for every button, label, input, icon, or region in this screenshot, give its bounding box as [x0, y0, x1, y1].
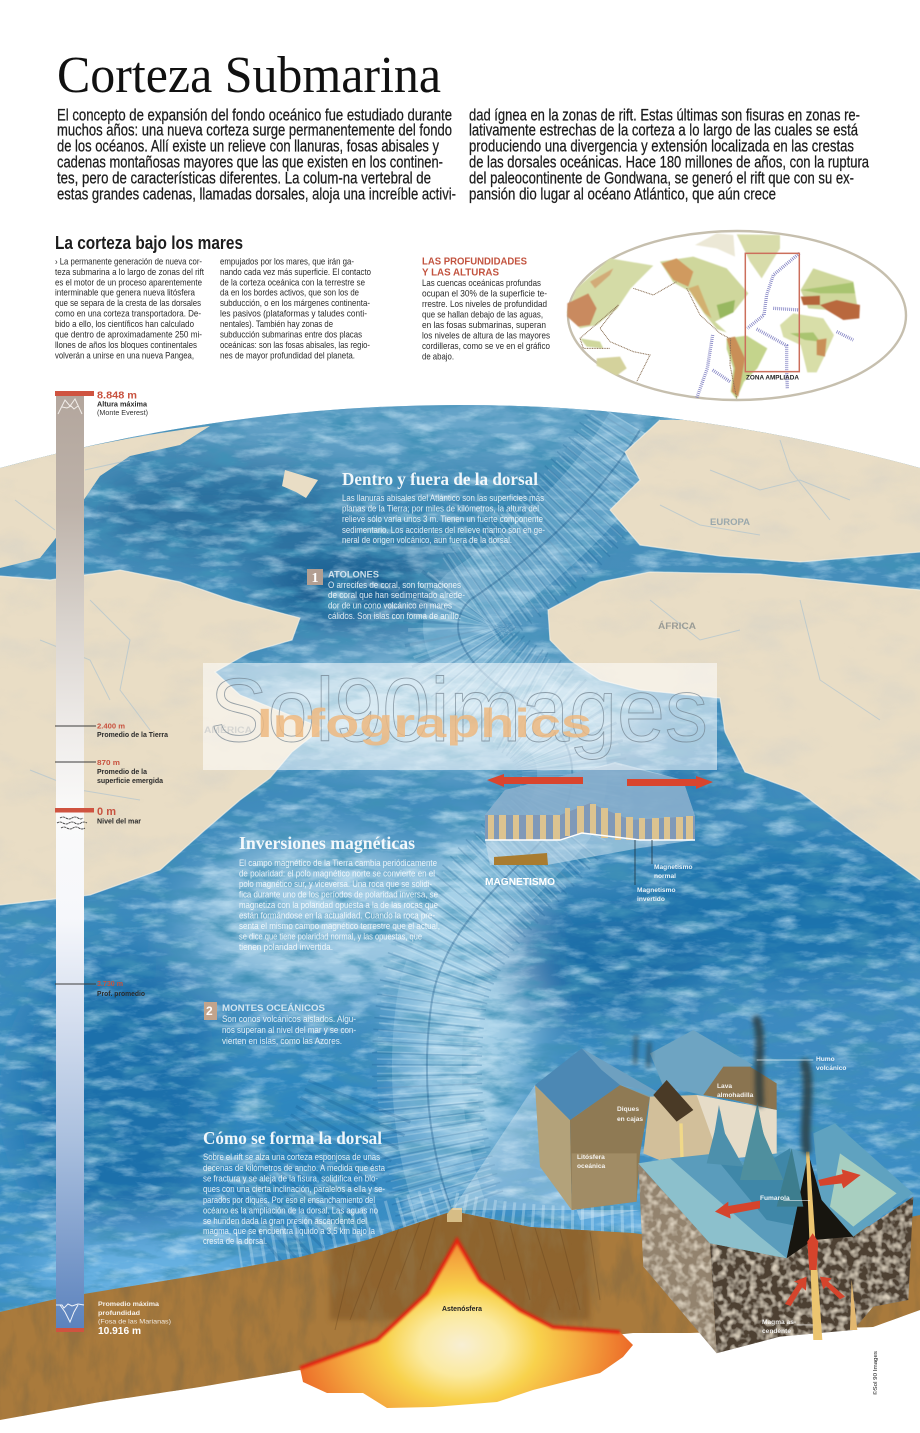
ocean floor relief map — [0, 400, 920, 1350]
scale labels: Nivel del mar — [97, 818, 141, 826]
intro text: left column: muchos años: una nueva corteza surge permanentemente del fondo — [57, 122, 452, 140]
block diagram labels: cendente — [762, 1328, 791, 1335]
section: cómo se forma la dorsal — [203, 1128, 386, 1246]
text block: profundidades: Las cuencas oceánicas profundas — [422, 278, 541, 288]
section: inversiones magnéticas: magnetiza con la polaridad opuesta a la de las rocas que — [239, 900, 438, 910]
intro text: left column: El concepto de expansión del fondo oceánico fue estudiado durante — [57, 106, 452, 124]
text block: profundidades: que se hallan debajo de las aguas, — [422, 310, 543, 320]
text block: corteza column 1: interminable que genera nueva litósfera — [55, 288, 196, 298]
section: inversiones magnéticas: El campo magnético de la Tierra cambia periódicamente — [239, 858, 437, 868]
section: inversiones magnéticas: están formándose en la actualidad. Cuando la roca pre- — [239, 910, 435, 920]
continents — [0, 400, 920, 920]
text block: corteza column 2: subducción submarinas entre dos placas — [220, 330, 362, 340]
section: inversiones magnéticas — [239, 833, 440, 952]
text block: corteza column 1: llones de años los bloques continentales — [55, 340, 197, 350]
stripes cross-section — [485, 803, 695, 840]
text block: corteza column 1: que dentro de aproximadamente 250 mi- — [55, 330, 202, 340]
label: zona ampliada: ZONA AMPLIADA — [746, 374, 799, 382]
text block: profundidades: cordilleras, como se ve en el gráfico — [422, 341, 550, 351]
text block: profundidades: de abajo. — [422, 352, 454, 362]
front block — [638, 1103, 913, 1353]
text block: corteza column 1: que se separa de la cresta de las dorsales — [55, 298, 201, 308]
section: inversiones magnéticas: se dice que tiene polaridad normal, y las opuestas, que — [239, 932, 422, 942]
intro text: left column — [57, 106, 456, 204]
label: magnetismo: MAGNETISMO — [485, 877, 555, 888]
text block: profundidades: rrestre. Los niveles de profundidad — [422, 299, 547, 309]
scale labels: 0 m — [97, 806, 116, 818]
text block: corteza column 1: como en una corteza transportadora. De- — [55, 308, 201, 318]
block diagram labels: Magma as- — [762, 1319, 796, 1326]
callout 2: montes oceánicos: 2 — [206, 1004, 213, 1018]
heading: las profundidades y las alturas — [422, 256, 527, 278]
text block: profundidades: en las fosas submarinas, superan — [422, 320, 546, 330]
scale labels: (Fosa de las Marianas) — [98, 1318, 171, 1326]
asthenosphere magma — [300, 1240, 633, 1408]
section: inversiones magnéticas: de polaridad: el polo magnético norte se convierte en el — [239, 868, 435, 878]
back block — [535, 1030, 777, 1210]
section: cómo se forma la dorsal: océano es la ampliación de la dorsal. Las aguas no — [203, 1206, 378, 1216]
section: inversiones magnéticas: tienen polaridad invertida. — [239, 942, 333, 952]
block diagram labels: volcánico — [816, 1065, 846, 1072]
section: cómo se forma la dorsal: Cómo se forma la dorsal — [203, 1128, 382, 1148]
label: África: ÁFRICA — [658, 621, 697, 631]
section: dentro y fuera de la dorsal: sedimentario. Los accidentes del relieve marino son en ge- — [342, 525, 545, 535]
block diagram labels: Humo — [816, 1056, 835, 1063]
text block: profundidades: ocupan el 30% de la superficie te- — [422, 288, 547, 298]
text block: profundidades: los niveles de altura de las mayores — [422, 330, 550, 340]
scale labels — [97, 390, 171, 1337]
earth crust band — [0, 1200, 920, 1430]
mid-ocean ridge — [240, 430, 640, 1262]
leader lines — [757, 1060, 813, 1325]
depth scale bar — [55, 391, 96, 1332]
section: dentro y fuera de la dorsal: Las llanuras abisales del Atlántico son las superficies más — [342, 493, 544, 503]
scale labels: 870 m — [97, 758, 120, 767]
section: dentro y fuera de la dorsal — [342, 469, 545, 545]
icon: trench — [56, 1304, 84, 1322]
scale labels: Prof. promedio — [97, 991, 145, 998]
callout 2: montes oceánicos: nos superan al nivel del mar y se con- — [222, 1025, 356, 1035]
world locator map — [567, 231, 906, 400]
intro text: right column — [469, 106, 870, 204]
intro text: left column: estas grandes cadenas, llamadas dorsales, aloja una increíble activi- — [57, 186, 456, 204]
scale labels: superficie emergida — [97, 778, 163, 785]
scale labels: 8.848 m — [97, 390, 137, 402]
label: normal / inverted: Magnetismo — [654, 864, 692, 871]
icon: waves — [57, 817, 87, 829]
rift enlargement fan — [452, 1085, 640, 1220]
scale labels: Promedio de la — [97, 769, 147, 776]
watermark panel: Sol90images — [210, 661, 708, 761]
watermark panel: Infographics — [257, 700, 592, 746]
callout 1: atolones: cálidos. Son islas con forma de anillo. — [328, 611, 461, 621]
block diagram labels: Fumarola — [760, 1195, 790, 1202]
scale labels: Promedio de la Tierra — [97, 732, 168, 739]
icon: mountain — [58, 399, 82, 414]
intro text: left column: tes, pero de características diferentes. La colum-na vertebral de — [57, 170, 431, 188]
intro text: left column: cadenas montañosas mayores que las que existen en los continen- — [57, 154, 443, 172]
text block: corteza column 2: da en los bordes activos, que son los de — [220, 288, 359, 298]
section: inversiones magnéticas: Inversiones magnéticas — [239, 833, 415, 853]
callout 2: montes oceánicos: MONTES OCEÁNICOS — [222, 1003, 325, 1014]
section: cómo se forma la dorsal: magma, que se encuentra líquido a 3,5 km bajo la — [203, 1226, 376, 1236]
ridge crest marker block — [447, 1208, 462, 1222]
section: inversiones magnéticas: fica durante uno de los períodos de polaridad inversa, se — [239, 890, 438, 900]
magnetism diagram — [485, 762, 713, 903]
callout 2: montes oceánicos: vierten en islas, como las Azores. — [222, 1036, 342, 1046]
text block: corteza column 2 — [220, 256, 371, 360]
block diagram labels: Diques — [617, 1106, 639, 1113]
title: Corteza Submarina — [57, 47, 441, 104]
scale labels: 2.400 m — [97, 722, 125, 730]
label: astenósfera: Astenósfera — [442, 1304, 483, 1313]
text block: corteza column 1: teza submarina a lo largo de zonas del rift — [55, 267, 204, 277]
block diagram labels: Litósfera — [577, 1154, 605, 1161]
expansion arrows — [487, 774, 713, 789]
block diagram labels: oceánica — [577, 1163, 606, 1170]
block diagram labels: Lava — [717, 1083, 732, 1090]
section: cómo se forma la dorsal: cresta de la dorsal. — [203, 1236, 267, 1246]
heading: las profundidades y las alturas: Y LAS ALTURAS — [422, 268, 499, 278]
block diagram labels: almohadilla — [717, 1092, 754, 1099]
label: normal / inverted — [637, 864, 692, 903]
text block: corteza column 1: es el motor de un proceso aparentemente — [55, 278, 202, 288]
text block: corteza column 1: volverán a unirse en una nueva Pangea, — [55, 350, 194, 360]
section: cómo se forma la dorsal: parados por diques. Por eso el ensanchamiento del — [203, 1195, 375, 1205]
block diagram labels — [577, 1056, 846, 1335]
heading: La corteza bajo los mares: La corteza bajo los mares — [55, 233, 243, 253]
section: cómo se forma la dorsal: se hunden dada la gran presión ascendente del — [203, 1216, 367, 1226]
section: cómo se forma la dorsal: decenas de kilómetros de ancho. A medida que ésta — [203, 1163, 386, 1173]
scale labels: 3.730 m — [97, 979, 123, 988]
scale labels: Altura máxima — [97, 402, 147, 408]
red level bars — [55, 391, 94, 1332]
section: cómo se forma la dorsal: ques con una cierta inclinación, paralelos a ella y se- — [203, 1184, 385, 1194]
text block: corteza column 2: empujados por los mares, que irán ga- — [220, 256, 354, 266]
section: dentro y fuera de la dorsal: planas de la Tierra; por miles de kilómetros, la altura del — [342, 504, 539, 514]
label: normal / inverted: normal — [654, 873, 676, 880]
intro text: left column: de los océanos. Allí existe un relieve con llanuras, fosas abisales y — [57, 138, 440, 156]
label: normal / inverted: Magnetismo — [637, 887, 675, 894]
section: dentro y fuera de la dorsal: Dentro y fuera de la dorsal — [342, 469, 538, 489]
label: América: AMÉRICA — [204, 725, 253, 735]
rift block diagram — [535, 1020, 913, 1353]
text block: corteza column 2: nando cada vez más superficie. El contacto — [220, 267, 371, 277]
callout 2: montes oceánicos: Son conos volcánicos aislados. Algu- — [222, 1014, 356, 1024]
callout 1: atolones: 1 — [312, 571, 318, 586]
callout 1: atolones: dor de un cono volcánico en mares — [328, 600, 452, 610]
text block: corteza column 2: les pasivos (plataformas y taludes conti- — [220, 308, 367, 318]
callout 1: atolones: O arrecifes de coral, son formaciones — [328, 580, 461, 590]
section: inversiones magnéticas: polo magnético sur, y viceversa. Una roca que se solidi- — [239, 879, 432, 889]
callout 2: montes oceánicos — [204, 1002, 356, 1046]
label: Europa: EUROPA — [710, 517, 751, 527]
text block: corteza column 2: nentales). También hay zonas de — [220, 319, 333, 329]
text block: corteza column 2: nes de mayor profundidad del planeta. — [220, 350, 355, 360]
section: inversiones magnéticas: senta el mismo campo magnético terrestre que el actual, — [239, 921, 440, 931]
callout 1: atolones: ATOLONES — [328, 570, 379, 580]
text block: corteza column 2: subducción, o en los márgenes continenta- — [220, 298, 370, 308]
intro text: right column: pansión dio lugar al océano Atlántico, que aún crece — [469, 186, 776, 204]
text block: corteza column 1: › La permanente generación de nueva cor- — [55, 256, 202, 266]
scale labels: profundidad — [98, 1310, 140, 1317]
scale labels: 10.916 m — [98, 1325, 141, 1337]
photo credit: ©Sol 90 Images — [872, 1351, 879, 1395]
volcanic smoke — [635, 1020, 808, 1150]
callout 1: atolones: de coral que han sedimentado alrede- — [328, 590, 465, 600]
block diagram labels: en cajas — [617, 1116, 643, 1123]
text block: corteza column 2: de la corteza oceánica con la terrestre se — [220, 278, 365, 288]
text block: corteza column 1 — [55, 256, 204, 360]
Newfoundland island — [282, 470, 318, 498]
label: normal / inverted: invertido — [637, 896, 665, 903]
section: cómo se forma la dorsal: Sobre el rift se alza una corteza esponjosa de unas — [203, 1152, 380, 1162]
text block: profundidades — [422, 278, 550, 362]
section: dentro y fuera de la dorsal: neral de origen volcánico, aun fuera de la dorsal. — [342, 535, 512, 545]
section: cómo se forma la dorsal: se fractura y se aleja de la fisura, solidifica en blo- — [203, 1174, 378, 1184]
scale labels: (Monte Everest) — [97, 410, 148, 417]
section: dentro y fuera de la dorsal: relieve sólo varía unos 3 m. Tienen un fuerte componente — [342, 514, 543, 524]
zoom rectangle — [745, 253, 799, 372]
callout 1: atolones — [307, 569, 465, 621]
heading: las profundidades y las alturas: LAS PROFUNDIDADES — [422, 256, 527, 268]
tectonic arrows — [715, 1169, 861, 1306]
text block: corteza column 1: bido a ello, los científicos han calculado — [55, 319, 194, 329]
scale labels: Promedio máxima — [98, 1301, 159, 1308]
text block: corteza column 2: oceánicas: son las fosas abisales, las regio- — [220, 340, 370, 350]
